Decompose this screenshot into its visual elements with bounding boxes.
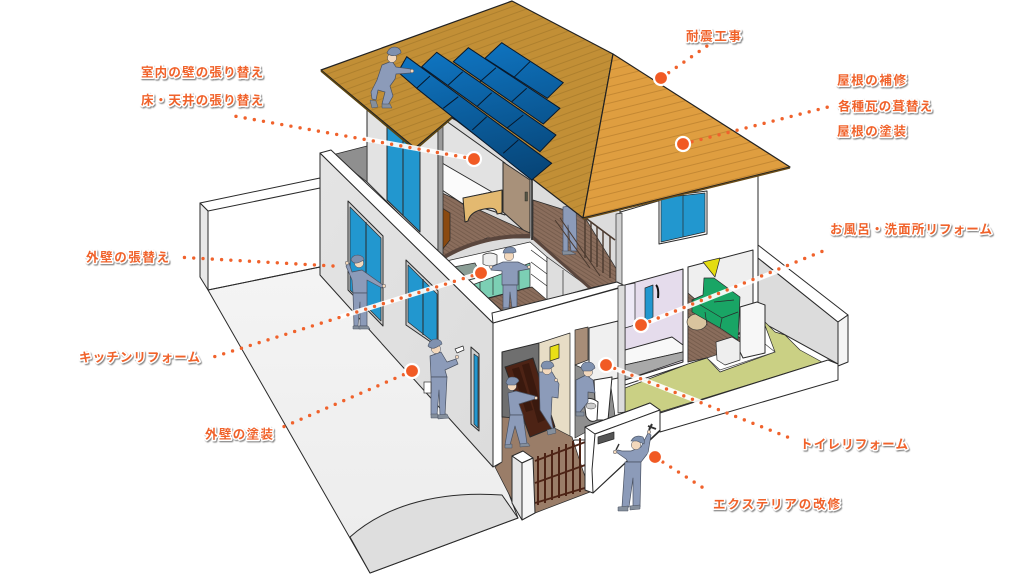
living room xyxy=(687,250,775,370)
curved floor rim xyxy=(441,236,530,259)
label: seismic: 耐震工事 xyxy=(686,28,741,44)
outer pillar xyxy=(618,285,625,413)
label: roof repair: 屋根の補修 xyxy=(837,72,906,88)
label: exterior wall painting: 外壁の塗装 xyxy=(205,426,273,442)
label: floor and ceiling: 床・天井の張り替え xyxy=(141,92,263,108)
staircase xyxy=(555,216,615,278)
roof: left plane xyxy=(321,1,613,218)
picture xyxy=(703,258,720,277)
window: upper right xyxy=(659,191,707,244)
window: lower left 1 xyxy=(348,201,383,326)
callout line: toilet xyxy=(599,358,795,440)
toilet xyxy=(584,377,612,421)
label: interior wall: 室内の壁の張り替え xyxy=(141,64,263,80)
green sofa xyxy=(692,278,740,340)
table xyxy=(687,314,707,330)
kitchen side wall xyxy=(531,250,547,286)
low front wall xyxy=(660,360,838,432)
upper left wall with tall window xyxy=(367,110,443,256)
toilet room xyxy=(575,327,588,365)
lower corridor wall xyxy=(547,257,590,300)
worker replacing siding xyxy=(345,255,386,329)
garden lawn xyxy=(625,320,822,412)
worker carrying door left xyxy=(505,377,538,448)
kitchen counter top xyxy=(448,263,482,282)
back fence xyxy=(200,178,320,290)
worker at toilet xyxy=(576,362,595,416)
roof: right plane xyxy=(583,54,790,218)
callout line: seismic work xyxy=(654,46,707,85)
label: exterior works: エクステリアの改修 xyxy=(713,496,840,512)
callout line: interior walls and floors xyxy=(234,116,481,166)
bed xyxy=(442,163,502,222)
headboard xyxy=(463,190,502,222)
outdoor units xyxy=(707,302,775,370)
left wall xyxy=(320,150,502,467)
mail slot xyxy=(598,432,614,444)
bedroom floor xyxy=(442,193,530,257)
paint bucket xyxy=(424,382,431,393)
right yard wall xyxy=(758,245,848,366)
entrance gate xyxy=(535,435,588,505)
callout line: bath and washroom xyxy=(634,249,828,332)
hammer xyxy=(648,424,656,430)
dresser xyxy=(442,208,450,250)
entrance recess xyxy=(502,343,539,420)
door being carried xyxy=(505,358,555,437)
worker with hammer xyxy=(613,424,656,511)
callout line: exterior works xyxy=(648,450,705,489)
entry floor xyxy=(495,417,590,520)
worker on roof xyxy=(370,47,414,108)
gate post xyxy=(512,451,535,520)
second floor interior back xyxy=(440,112,620,292)
yellow sign xyxy=(550,344,559,361)
back wall and door xyxy=(442,118,530,236)
callout line: exterior wall painting xyxy=(283,364,419,427)
label: roof painting: 屋根の塗装 xyxy=(837,124,906,138)
interior divider post xyxy=(616,213,622,286)
label: tile replacement: 各種瓦の葺替え xyxy=(838,98,932,114)
callout line: exterior wall replacement xyxy=(176,257,333,266)
label: exterior wall replacement: 外壁の張替え xyxy=(86,250,169,264)
worker carrying door right xyxy=(539,361,559,435)
kitchen floor xyxy=(482,287,547,314)
worker painting wall xyxy=(424,339,464,419)
upper house wall with window xyxy=(617,172,758,385)
label: kitchen: キッチンリフォーム xyxy=(79,350,200,364)
callout line: kitchen xyxy=(207,266,488,359)
driveway ground xyxy=(208,267,518,573)
balcony parapet top xyxy=(320,150,502,323)
label: toilet: トイレリフォーム xyxy=(800,438,908,452)
kitchen cabinets xyxy=(467,263,530,300)
range hood xyxy=(483,253,497,266)
window: lower left 2 xyxy=(406,260,438,347)
solar panels xyxy=(398,43,563,180)
bathroom xyxy=(625,269,683,380)
roof xyxy=(321,1,790,219)
worker in kitchen xyxy=(489,247,531,311)
front wall and entrance xyxy=(492,282,625,520)
balcony recess xyxy=(332,146,438,262)
hallway floor xyxy=(533,200,617,288)
worker on stairs xyxy=(562,205,577,255)
exterior gate wall xyxy=(585,403,660,493)
kitchen xyxy=(442,242,590,314)
paint brush xyxy=(455,346,464,353)
window: narrow slit xyxy=(471,347,479,431)
callout line: roof xyxy=(676,106,832,151)
label: bath and washroom: お風呂・洗面所リフォーム xyxy=(830,222,992,236)
